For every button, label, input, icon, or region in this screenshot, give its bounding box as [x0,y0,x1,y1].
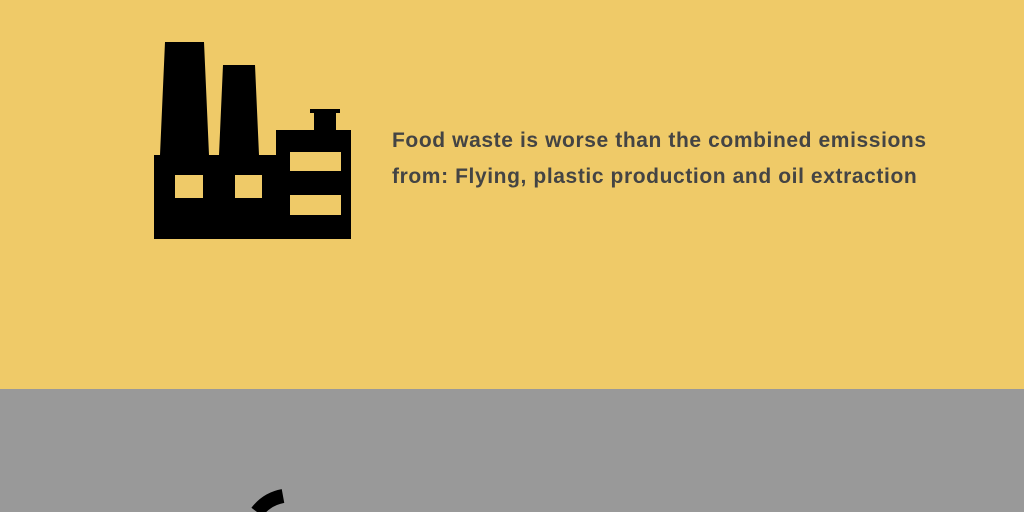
panel: bottom gray section [0,389,1024,512]
panel: top yellow section [0,0,1024,389]
text block: food waste fact [392,129,927,188]
text block: food waste fact: Food waste is worse than the combined emissions [392,129,927,152]
text block: food waste fact: from: Flying, plastic production and oil extraction [392,165,917,188]
icon: partial arc in bottom section [252,489,284,512]
